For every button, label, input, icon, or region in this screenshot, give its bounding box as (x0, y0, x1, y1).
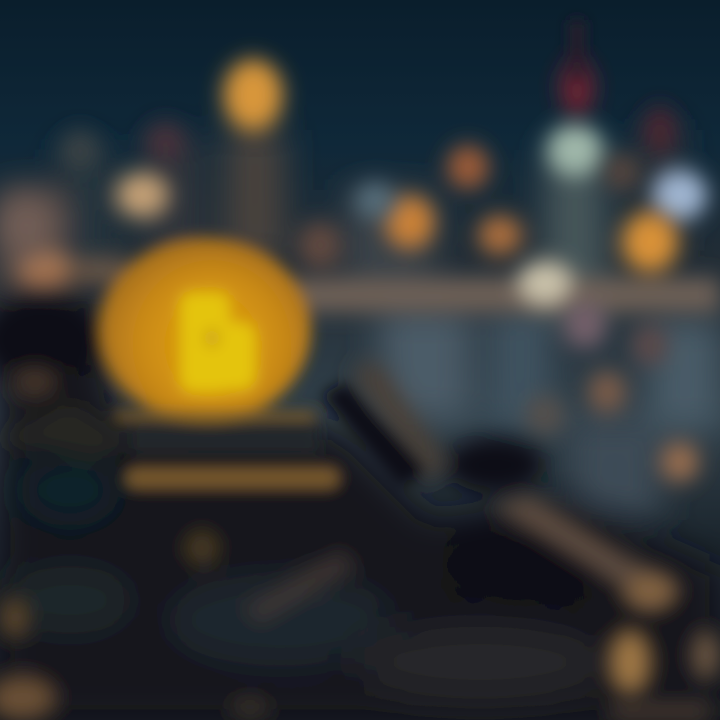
main gold coin (99, 238, 311, 422)
highlight: amber end of streak (625, 575, 675, 609)
tan diagonal edge lower right (490, 495, 680, 606)
coin stack below the main coin (0, 366, 340, 489)
skyline: blurred buildings (0, 130, 720, 520)
light: blue-white right (653, 170, 707, 220)
light: pale pink far left (0, 195, 53, 255)
highlight: small amber center-left (185, 531, 219, 565)
dark mass lower left (0, 295, 720, 720)
light: rust lower (632, 325, 668, 365)
dim band left (11, 366, 59, 398)
highlight: bottom mid (230, 698, 270, 718)
light: dim left high (60, 130, 100, 170)
thin gold rim (115, 411, 315, 421)
light: left orange (20, 250, 68, 294)
highlight: amber right edge (693, 631, 719, 679)
slate mound bottom right (355, 624, 605, 700)
light: orange lower (588, 371, 626, 413)
dark coin stack top left (0, 300, 100, 380)
light: tower red top (560, 60, 594, 116)
dim band left diagonal (0, 400, 130, 460)
coin glow center (152, 279, 272, 411)
light: orange bottom right (661, 442, 699, 482)
highlight: amber bottom right (610, 630, 650, 694)
diagonal tan edge (350, 360, 450, 482)
gold stack band (125, 467, 340, 489)
bokeh lights (0, 20, 707, 482)
highlight: bottom left (0, 676, 56, 720)
light: large amber top (223, 59, 283, 131)
coin symbol hollow (204, 328, 220, 348)
highlight: streak center (240, 550, 360, 625)
light: pink lower (564, 302, 606, 348)
foreground gold highlights (0, 531, 719, 720)
light: tower spire (570, 20, 584, 80)
light: dim red left (145, 122, 185, 162)
highlight: left edge (0, 598, 28, 638)
dark stack band (130, 425, 320, 455)
coin symbol (180, 292, 256, 392)
light: pale left (116, 172, 168, 218)
light: amber right (622, 212, 678, 272)
coin pile and dark rocks (0, 295, 720, 720)
coin disc (99, 238, 311, 422)
black coin mid-right (445, 437, 545, 493)
slate mound bottom left (5, 564, 135, 636)
black mound right (440, 527, 620, 603)
diagonal dark coin (322, 382, 425, 488)
light: center blue halo (355, 182, 395, 218)
light: faint rust left of center (298, 221, 342, 269)
bridge band behind the coin (40, 258, 720, 312)
light: white center-right (518, 261, 572, 305)
light: dim mid (525, 395, 565, 435)
light: tower teal-white (547, 124, 603, 176)
light: faint rust right (604, 152, 640, 192)
light: orange right of center (478, 215, 522, 255)
light: center orange (386, 196, 434, 248)
slate mound bottom center (165, 572, 395, 668)
highlight: bottom streak (610, 704, 710, 720)
dark blue mid left (20, 454, 120, 526)
light: red right (643, 106, 677, 154)
light: rust (447, 145, 489, 189)
